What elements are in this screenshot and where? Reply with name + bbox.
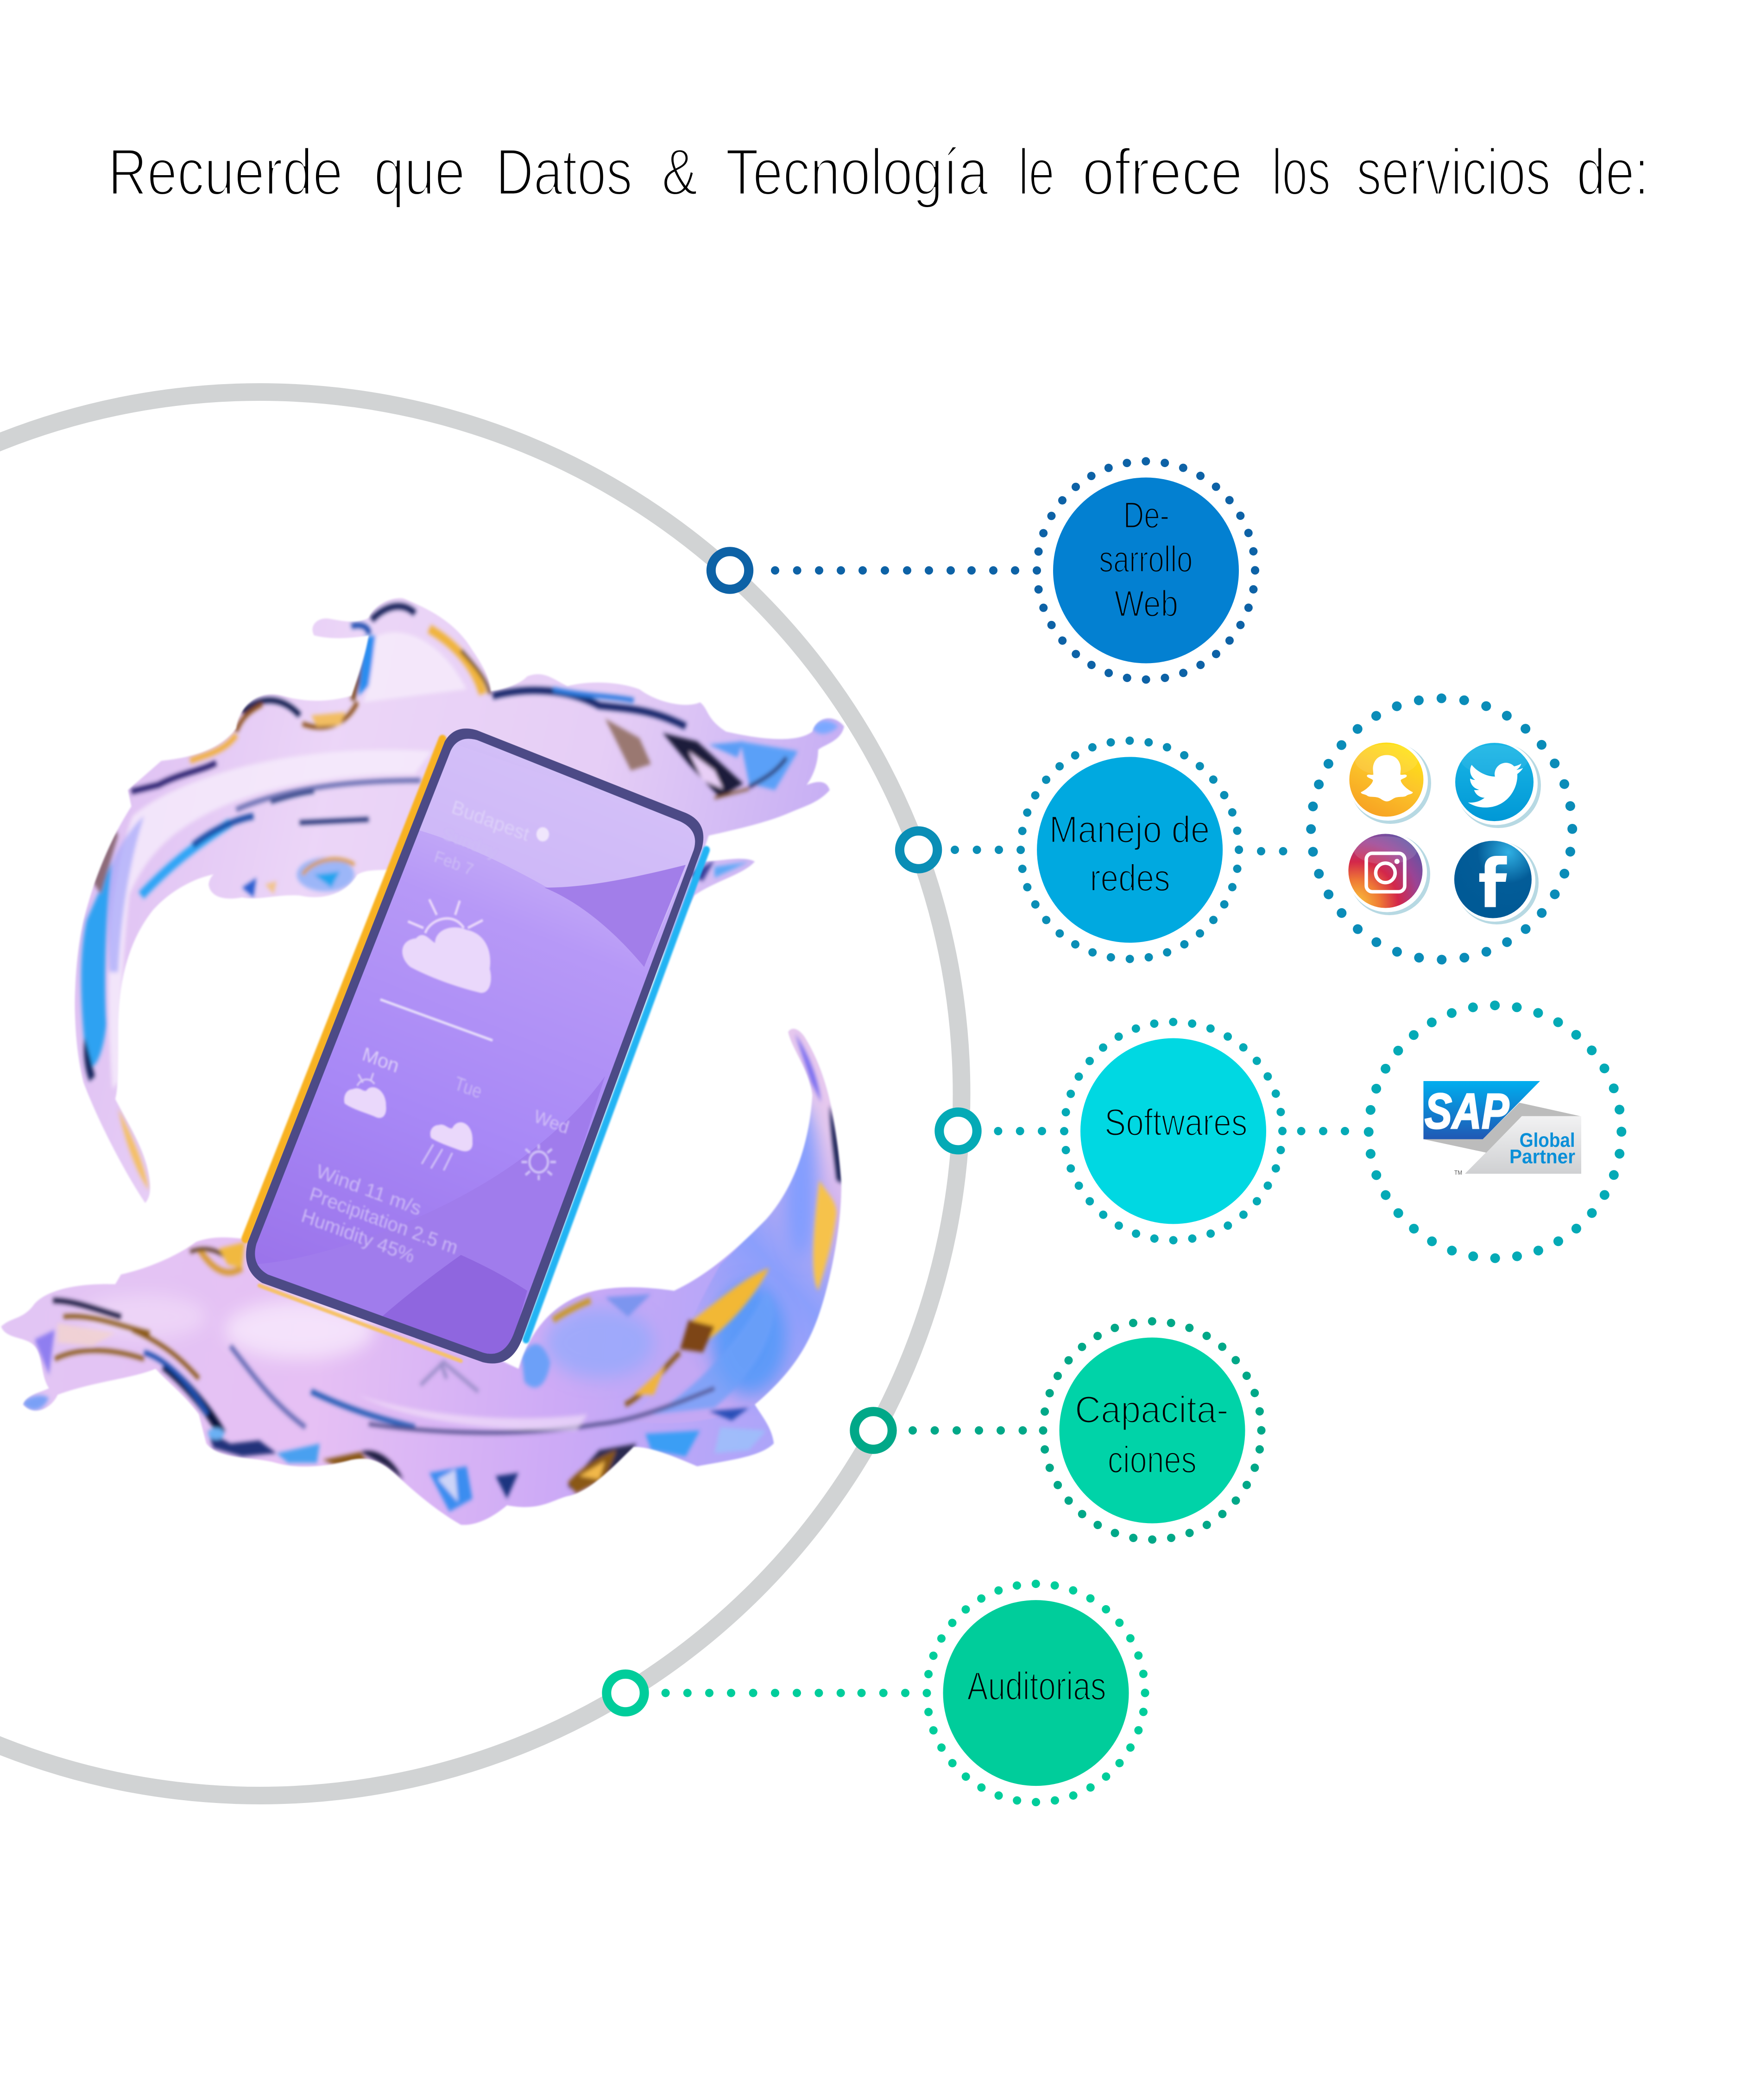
weather content: Precipitation 2.5 m [307, 1183, 460, 1259]
icon: sun [521, 1145, 556, 1180]
icon: facebook [1454, 840, 1539, 924]
dotted ring [1064, 1022, 1282, 1240]
node: Softwares [939, 1022, 1349, 1240]
filled circle [1059, 1337, 1245, 1524]
title: Recuerde [108, 135, 343, 209]
city label: Budapest [449, 796, 532, 846]
day label: Mon [360, 1044, 402, 1077]
date number: Feb 7 [432, 848, 475, 879]
title: los [1272, 135, 1331, 209]
dotted ring [1369, 1006, 1622, 1258]
icon: rain cloud [422, 1122, 473, 1170]
icon: twitter [1454, 741, 1541, 828]
dotted ring [1311, 698, 1572, 960]
orbit marker [900, 831, 937, 869]
dotted ring [927, 1584, 1145, 1802]
orbit marker [854, 1411, 892, 1449]
icon: SAP Global Partner logo: SAP [1425, 1083, 1509, 1139]
title: ofrece [1082, 135, 1243, 209]
title: servicios [1357, 135, 1551, 209]
phone [230, 719, 720, 1375]
panel: social networks [1311, 698, 1572, 960]
title: Datos [496, 135, 632, 209]
orbit marker [939, 1112, 977, 1150]
connector dots [951, 846, 1287, 855]
illustration: phone in liquid splash [1, 598, 844, 1525]
filled circle [943, 1600, 1129, 1786]
dotted ring [1021, 740, 1239, 959]
filled circle [1037, 757, 1223, 942]
dotted ring [1037, 462, 1255, 679]
label: Manejo de [1049, 809, 1210, 851]
connector dots [771, 566, 1019, 575]
label: Auditorias [967, 1664, 1106, 1708]
large grey orbit circle [0, 392, 962, 1796]
icon: SAP Global Partner logo: Global [1520, 1129, 1575, 1151]
phone frame [246, 728, 703, 1363]
title: le [1018, 135, 1054, 209]
node: Capacitaciones [854, 1322, 1261, 1539]
day label: Tue [452, 1073, 485, 1103]
node: Desarrollo Web [711, 462, 1255, 679]
phone screen [255, 739, 695, 1354]
connector dots [909, 1426, 1027, 1435]
weather content: Humidity 45% [299, 1205, 417, 1267]
icon: SAP Global Partner logo [1423, 1081, 1581, 1176]
connector dots [662, 1689, 909, 1697]
date label: Sunday [441, 825, 500, 862]
label: Web [1115, 583, 1178, 624]
label [1099, 494, 1193, 624]
icon: SAP Global Partner logo: TM [1454, 1169, 1462, 1176]
title: de: [1577, 135, 1649, 209]
icon: instagram [1347, 832, 1430, 915]
title: que [374, 135, 465, 209]
filled circle [1080, 1038, 1266, 1224]
dotted ring [1043, 1322, 1261, 1539]
label: sarrollo [1099, 538, 1193, 580]
weather stats: Wind 11 m/s [314, 1160, 424, 1220]
label: De- [1124, 494, 1169, 536]
icon: location pin [537, 827, 549, 841]
orbit marker [711, 551, 749, 589]
title: & [662, 135, 698, 209]
icon: SAP Global Partner logo: Partner [1509, 1146, 1575, 1168]
label: Capacita- [1075, 1389, 1229, 1431]
label [1075, 1389, 1229, 1481]
icon: snapchat [1348, 741, 1431, 824]
upper liquid splash [75, 598, 844, 1203]
label [1049, 809, 1210, 899]
phone edge glow [246, 740, 707, 1361]
label: ciones [1108, 1439, 1197, 1481]
connector dots [994, 1127, 1349, 1135]
lower liquid splash [1, 1029, 842, 1525]
filled circle [1053, 477, 1239, 664]
day label: Wed [532, 1106, 571, 1138]
icon: small cloud [344, 1073, 386, 1118]
icon: large cloud and sun [402, 899, 491, 993]
node: Auditorias [606, 1584, 1145, 1802]
node: Manejo de redes [900, 740, 1287, 959]
label: Softwares [1105, 1101, 1247, 1144]
orbit marker [606, 1674, 644, 1712]
weather content [299, 796, 571, 1281]
panel: SAP partner [1369, 1006, 1622, 1258]
label: redes [1090, 857, 1170, 899]
title: Tecnología [726, 135, 988, 209]
title [108, 135, 1649, 209]
